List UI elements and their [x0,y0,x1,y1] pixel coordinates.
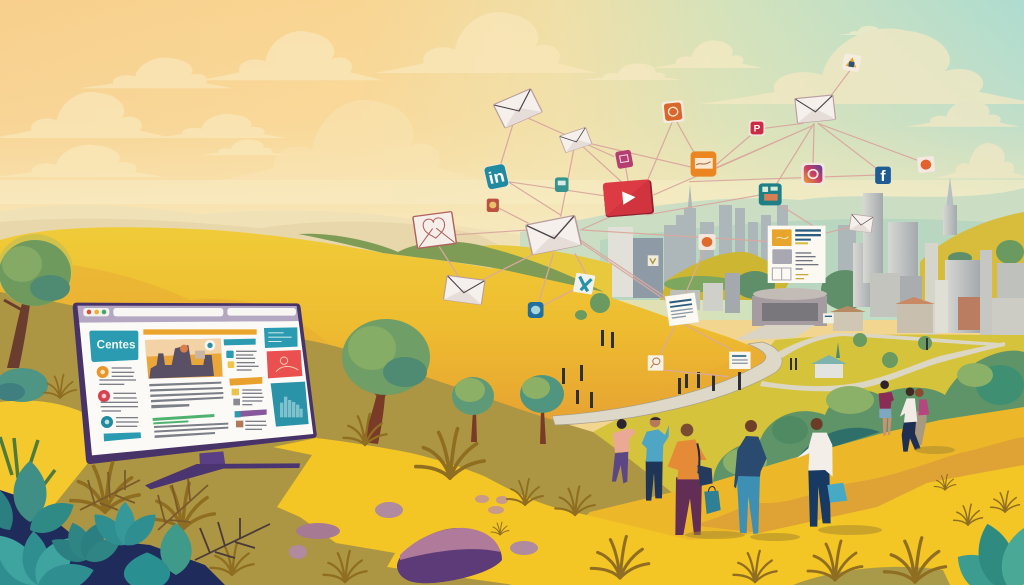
orange mail icon [691,151,716,177]
small house [811,342,847,378]
person: man in navy shirt [734,420,767,534]
magnifier card [648,355,663,371]
header bar [143,329,257,335]
monitor frame [73,303,317,464]
olive shadow ground [0,292,675,585]
envelope node: upper [559,127,592,153]
branch path lower [760,342,1005,391]
right top card [264,327,298,348]
lemon yellow foreground hill [273,438,1024,585]
tree: centre large [342,319,430,444]
near city buildings [608,177,1024,340]
lower right hillside [510,407,1024,585]
teal blocks icon [759,183,782,205]
envelope node: top right [795,95,836,123]
side column widgets [224,339,267,430]
building card [648,255,658,266]
person: woman in pink [612,419,635,483]
orange clock icon [661,100,685,123]
screen [79,321,313,455]
olive patch lower right [793,567,950,585]
people group [612,380,929,535]
pink icon [615,150,634,169]
small document card [729,352,751,369]
article text lines [149,382,228,438]
foreground teal plant right [948,516,1024,585]
grass tufts [44,375,1019,582]
person: woman with backpack [914,388,929,445]
logo tile: Centes [97,339,136,352]
envelope node: lower [444,275,485,305]
browser chrome [77,306,299,323]
right red card [267,350,302,378]
hero image [145,339,223,379]
secondary yellow hill [470,245,612,300]
winding white path [552,342,782,425]
main golden hill [0,227,780,425]
rocks [289,495,538,583]
hill orange shading [0,261,780,410]
green lines [153,414,214,424]
network nodes [413,53,935,371]
LinkedIn icon [483,163,509,190]
city civic building [735,288,935,340]
tree: left [0,234,73,368]
LinkedIn icon: in [487,166,506,188]
small city card [823,313,834,323]
envelope node: small right [849,214,873,233]
far city skyline [664,184,856,298]
red P icon [749,120,765,136]
red P icon: P [754,124,761,135]
Instagram icon [801,163,825,185]
yellow left ground [0,400,88,520]
orange band on hillside [690,437,1024,533]
yellow top icon [842,53,862,72]
right yellow hill [920,212,1024,300]
browser buttons [83,308,296,316]
Facebook icon [875,167,891,185]
orange bubble icon [698,234,716,250]
document panel [768,226,826,283]
tree: small [452,377,494,442]
sky [0,0,1024,320]
green ridge strip [298,234,604,292]
green bushes [713,351,1024,487]
person: woman in white [900,387,921,452]
right chart card [271,382,309,427]
small yellow hill [660,252,790,300]
green city trees [664,240,1024,310]
far hills and mist [0,180,1024,300]
person: man in orange [668,424,721,535]
document card [665,293,699,326]
person: woman in maroon [879,380,894,436]
ground shadows [685,446,955,541]
envelope node: top left [493,89,542,128]
envelope node: large centre [526,215,581,255]
person: man in blue [642,417,669,501]
fern fronds [80,470,270,560]
orange face icon [917,156,935,173]
teal X card icon [573,273,595,295]
YouTube icon [603,179,654,218]
tree: small right [520,375,564,444]
clouds [0,12,1024,181]
meadow behind path [593,334,1024,495]
bush: left [0,368,48,402]
network connection lines [439,68,921,377]
logo tile [89,331,138,362]
person: man in white shirt [797,418,847,527]
small teal icon [555,177,569,192]
left column list [97,366,141,441]
Facebook icon: f [880,168,887,185]
small red icon [487,199,499,212]
blue circle icon [528,302,544,318]
branch path upper [778,333,1000,358]
monitor [73,303,317,489]
distant people on hill [562,330,928,408]
envelope node: heart bag [413,212,456,248]
monitor stand [145,451,300,489]
park trees [575,293,932,368]
foreground teal plants [0,437,225,585]
